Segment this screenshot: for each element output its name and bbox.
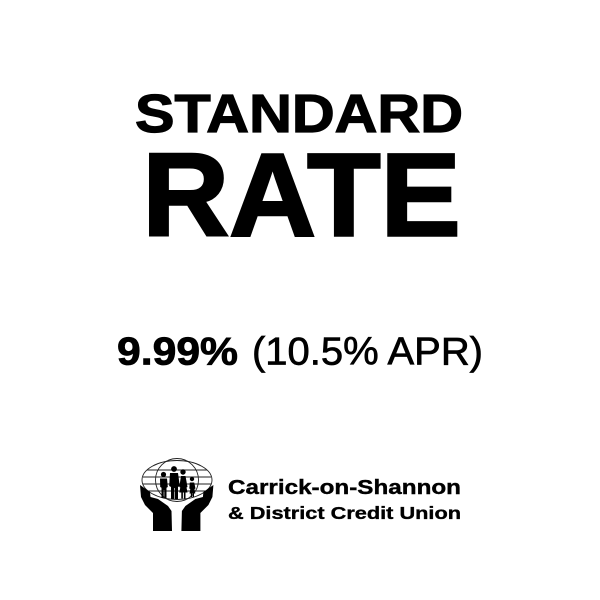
globe xyxy=(142,458,212,502)
rate figure xyxy=(117,330,483,374)
heading: standard: STANDARD xyxy=(135,84,463,144)
rate figure: 9.99% xyxy=(117,330,238,374)
logo name line 2: & District Credit Union xyxy=(228,503,461,523)
logo name line 1: Carrick-on-Shannon xyxy=(228,476,461,499)
right hand xyxy=(181,485,213,531)
rate figure: (10.5% APR) xyxy=(252,330,483,374)
icon: globe, family and hands xyxy=(140,458,213,531)
family figures xyxy=(160,466,196,499)
heading: rate: RATE xyxy=(142,130,461,262)
logo: credit union xyxy=(140,458,461,531)
left hand xyxy=(140,485,172,531)
